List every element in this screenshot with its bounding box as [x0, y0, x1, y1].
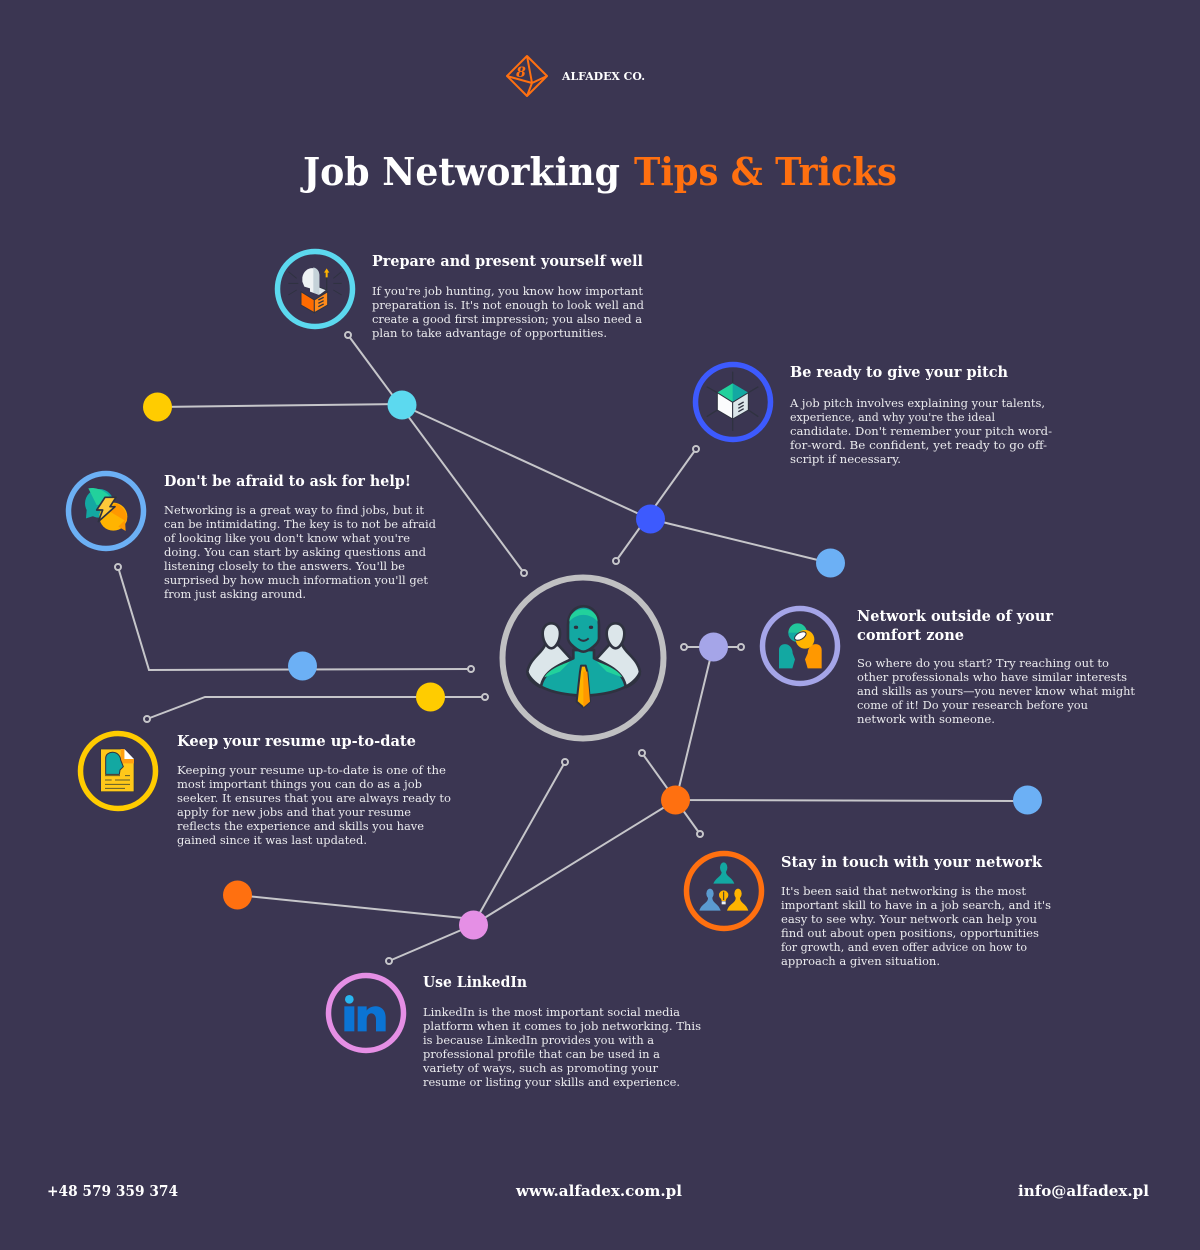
icon: three people and light bulb	[686, 854, 762, 928]
panel: don't be afraid to ask for help: surprised by how much information you'll get	[164, 573, 428, 587]
icon: cube	[696, 364, 770, 440]
footer: contact details	[47, 1183, 1149, 1200]
panel: don't be afraid to ask for help: Don't be afraid to ask for help!	[164, 473, 411, 490]
panel: prepare and present yourself well: preparation is. It's not enough to look well and	[372, 298, 644, 312]
panel: use LinkedIn: Use LinkedIn	[423, 974, 527, 991]
footer: contact details: info@alfadex.pl	[1018, 1183, 1149, 1200]
panel: keep your resume up-to-date	[80, 733, 451, 847]
panel: network outside of your comfort zone: other professionals who have similar interests	[857, 670, 1127, 684]
panel: be ready to give your pitch	[696, 364, 1052, 466]
panel: network outside of your comfort zone	[762, 608, 1135, 726]
panel: network outside of your comfort zone: So where do you start? Try reaching out to	[857, 656, 1109, 670]
panel: prepare and present yourself well: If you're job hunting, you know how important	[372, 284, 643, 298]
panel: stay in touch with your network: easy to see why. Your network can help you	[781, 912, 1037, 926]
panel: keep your resume up-to-date: Keeping your resume up-to-date is one of the	[177, 763, 446, 777]
panel: use LinkedIn: platform when it comes to job networking. This	[423, 1019, 701, 1033]
panel: stay in touch with your network: important skill to have in a job search, and it's	[781, 898, 1051, 912]
panel: network outside of your comfort zone: Network outside of your	[857, 608, 1053, 625]
panel: use LinkedIn: professional profile that can be used in a	[423, 1047, 660, 1061]
panel: use LinkedIn: variety of ways, such as promoting your	[422, 1061, 659, 1075]
panel: use LinkedIn: resume or listing your skills and experience.	[423, 1075, 680, 1089]
panel: stay in touch with your network	[686, 854, 1051, 968]
panel: don't be afraid to ask for help: can be intimidating. The key is to not be afraid	[164, 517, 436, 531]
panel: prepare and present yourself well	[278, 252, 644, 340]
panel: don't be afraid to ask for help: of looking like you don't know what you're	[164, 531, 410, 545]
panel: network outside of your comfort zone: comfort zone	[857, 627, 964, 644]
panel: keep your resume up-to-date: seeker. It ensures that you are always ready to	[177, 791, 451, 805]
footer: contact details: www.alfadex.com.pl	[515, 1183, 682, 1200]
icon: LinkedIn logo	[328, 976, 404, 1050]
panel: be ready to give your pitch: Be ready to give your pitch	[790, 364, 1008, 381]
panel: be ready to give your pitch: candidate. Don't remember your pitch word-	[790, 424, 1052, 438]
panel: keep your resume up-to-date: apply for new jobs and that your resume	[177, 805, 411, 819]
panel: be ready to give your pitch: script if necessary.	[790, 452, 901, 466]
icon: speech bubbles with lightning	[68, 474, 144, 548]
panel: keep your resume up-to-date: reflects the experience and skills you have	[177, 819, 424, 833]
panel: be ready to give your pitch: experience, and why you're the ideal	[790, 410, 995, 424]
panel: stay in touch with your network: It's been said that networking is the most	[781, 884, 1026, 898]
icon: two heads with shared thought	[762, 608, 838, 684]
panel: prepare and present yourself well: create a good first impression; you also need a	[372, 312, 642, 326]
logo: Alfadex Co.	[507, 56, 645, 96]
title: Job Networking	[300, 149, 620, 194]
panel: be ready to give your pitch: A job pitch involves explaining your talents,	[789, 396, 1045, 410]
title: Tips & Tricks	[634, 149, 897, 194]
icon: person in open book	[278, 252, 352, 326]
panel: don't be afraid to ask for help: listening closely to the answers. You'll be	[164, 559, 405, 573]
panel: use LinkedIn: is because LinkedIn provides you with a	[423, 1033, 654, 1047]
panel: keep your resume up-to-date: Keep your resume up-to-date	[177, 733, 416, 750]
panel: don't be afraid to ask for help	[68, 473, 436, 601]
panel: be ready to give your pitch: for-word. Be confident, yet ready to go off-	[790, 438, 1047, 452]
network nodes	[143, 390, 1042, 940]
panel: stay in touch with your network: Stay in touch with your network	[781, 854, 1043, 871]
panel: don't be afraid to ask for help: from just asking around.	[164, 587, 306, 601]
panel: use LinkedIn	[328, 974, 701, 1089]
panel: keep your resume up-to-date: most important things you can do as a job	[177, 777, 422, 791]
footer: contact details: +48 579 359 374	[47, 1183, 178, 1200]
panel: network outside of your comfort zone: come of it! Do your research before you	[857, 698, 1088, 712]
panel: stay in touch with your network: find out about open positions, opportunities	[781, 926, 1039, 940]
panel: keep your resume up-to-date: gained since it was last updated.	[177, 833, 367, 847]
panel: network outside of your comfort zone: network with someone.	[857, 712, 995, 726]
panel: don't be afraid to ask for help: Networking is a great way to find jobs, but it	[164, 503, 424, 517]
panel: network outside of your comfort zone: and skills as yours—you never know what might	[857, 684, 1135, 698]
panel: stay in touch with your network: approach a given situation.	[781, 954, 940, 968]
title	[300, 149, 897, 194]
panel: don't be afraid to ask for help: doing. You can start by asking questions and	[164, 545, 426, 559]
central icon: team of three people	[502, 578, 664, 738]
panel: prepare and present yourself well: plan to take advantage of opportunities.	[372, 326, 607, 340]
logo: Alfadex Co.: ALFADEX CO.	[561, 70, 645, 83]
logo: Alfadex Co.: 8	[516, 65, 526, 81]
panel: prepare and present yourself well: Prepare and present yourself well	[372, 253, 643, 270]
panel: use LinkedIn: LinkedIn is the most important social media	[423, 1005, 680, 1019]
icon: resume document	[80, 734, 156, 808]
network connector lines	[115, 332, 1027, 964]
panel: stay in touch with your network: for growth, and even offer advice on how to	[781, 940, 1027, 954]
